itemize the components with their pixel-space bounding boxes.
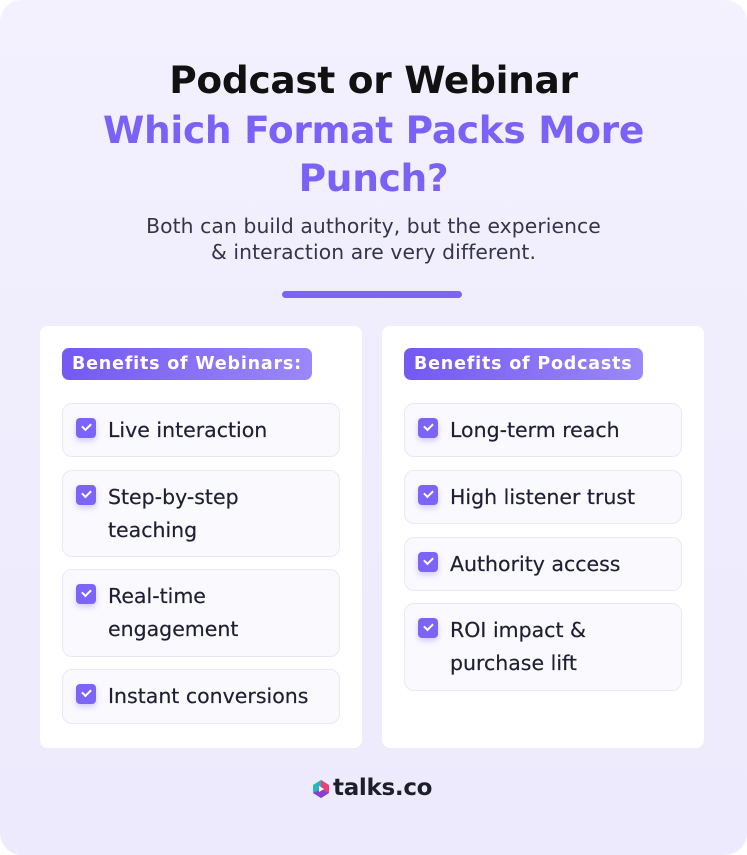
badge: podcasts xyxy=(404,348,643,380)
title line 1: Podcast or Webinar xyxy=(169,58,578,102)
subtitle xyxy=(146,214,601,264)
item: long-term reach xyxy=(404,403,682,457)
item: ROI: ROI impact & xyxy=(450,618,586,642)
item: ROI: purchase lift xyxy=(450,651,577,675)
item: step-by-step: teaching xyxy=(108,518,197,542)
item: authority access: Authority access xyxy=(450,552,620,576)
item: long-term reach: Long-term reach xyxy=(450,418,620,442)
panel: podcasts xyxy=(382,326,704,748)
item: instant conversions xyxy=(62,669,340,724)
panel: webinars xyxy=(40,326,362,748)
icon: logo mark xyxy=(313,780,329,798)
item: live interaction: Live interaction xyxy=(108,418,267,442)
item: ROI xyxy=(404,603,682,691)
badge: podcasts: Benefits of Podcasts xyxy=(414,354,633,374)
subtitle: Both can build authority, but the experience xyxy=(146,214,601,238)
title line 2-3: Punch? xyxy=(299,156,448,200)
item: live interaction xyxy=(62,403,340,457)
item: real-time: Real-time xyxy=(108,584,206,608)
item: listener trust xyxy=(404,470,682,524)
item: real-time xyxy=(62,569,340,657)
title line 2-3: Which Format Packs More xyxy=(103,108,644,152)
logo: talks.co xyxy=(333,775,432,801)
item: real-time: engagement xyxy=(108,617,238,641)
item: instant conversions: Instant conversions xyxy=(108,684,308,708)
item: authority access xyxy=(404,537,682,591)
badge: webinars xyxy=(62,348,312,380)
divider bar xyxy=(282,291,462,298)
item: step-by-step xyxy=(62,470,340,557)
subtitle: & interaction are very different. xyxy=(211,240,536,264)
title line 2-3 xyxy=(103,108,644,200)
badge: webinars: Benefits of Webinars: xyxy=(72,354,302,374)
item: listener trust: High listener trust xyxy=(450,485,635,509)
item: step-by-step: Step-by-step xyxy=(108,485,239,509)
